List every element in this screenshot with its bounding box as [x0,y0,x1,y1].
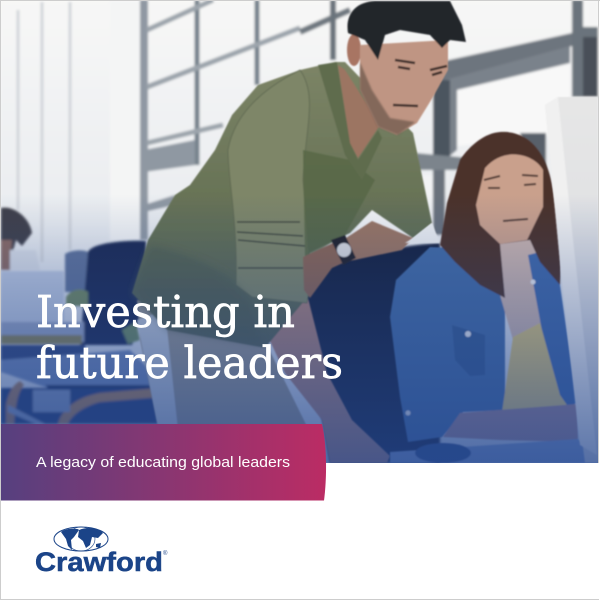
banner subtitle: A legacy of educating global leaders [36,454,290,471]
woman: face [476,154,543,244]
man: light trouser side [136,314,178,424]
woman: denim jacket [390,247,505,442]
man: collar [318,62,382,180]
woman: jacket right side [528,250,577,412]
man: trousers [136,300,306,424]
gradient banner [1,424,326,500]
icon: globe [54,527,108,551]
standing man [132,1,466,463]
dark chair behind the seated woman [300,243,440,463]
photo: two colleagues at a monitor [0,0,600,463]
window glare behind woman [405,223,440,243]
seated woman [390,132,600,463]
wordmark: Crawford [35,547,163,577]
man: lower arm and hand [270,298,390,463]
man: chest shade [303,150,375,258]
office background wall and windows [0,0,600,463]
man: shirt torso [132,62,432,348]
woman: pocket and buttons [406,280,536,416]
blue gradient overlay [1,207,598,463]
woman: eyes, brows and lips [484,175,538,221]
man: ear [347,34,361,66]
man: sleeve folds and cuff [237,222,305,268]
Crawford logo [35,527,168,577]
man: wristwatch [331,235,356,265]
woman: yellow top [502,323,567,412]
man: neck and open collar [338,65,380,158]
computer monitor [551,96,598,463]
man: eyes, moustache and mouth [393,60,447,106]
title: Investing in [36,287,295,338]
man: body shadow [138,250,186,334]
woman: forearm [443,404,578,442]
computer mouse [415,443,471,463]
woman: neck and chest [500,240,541,338]
background colleague and furniture [1,208,170,424]
woman: hair [440,132,561,298]
man: hair [347,1,466,60]
desk [390,439,600,463]
man: shirt sleeve [228,70,311,303]
man: forearm [343,221,413,262]
man: hand on arm [303,243,345,298]
man: stubble [360,62,415,135]
man: head and face [360,40,448,135]
title: future leaders [36,338,343,389]
registered mark: ® [163,550,168,557]
